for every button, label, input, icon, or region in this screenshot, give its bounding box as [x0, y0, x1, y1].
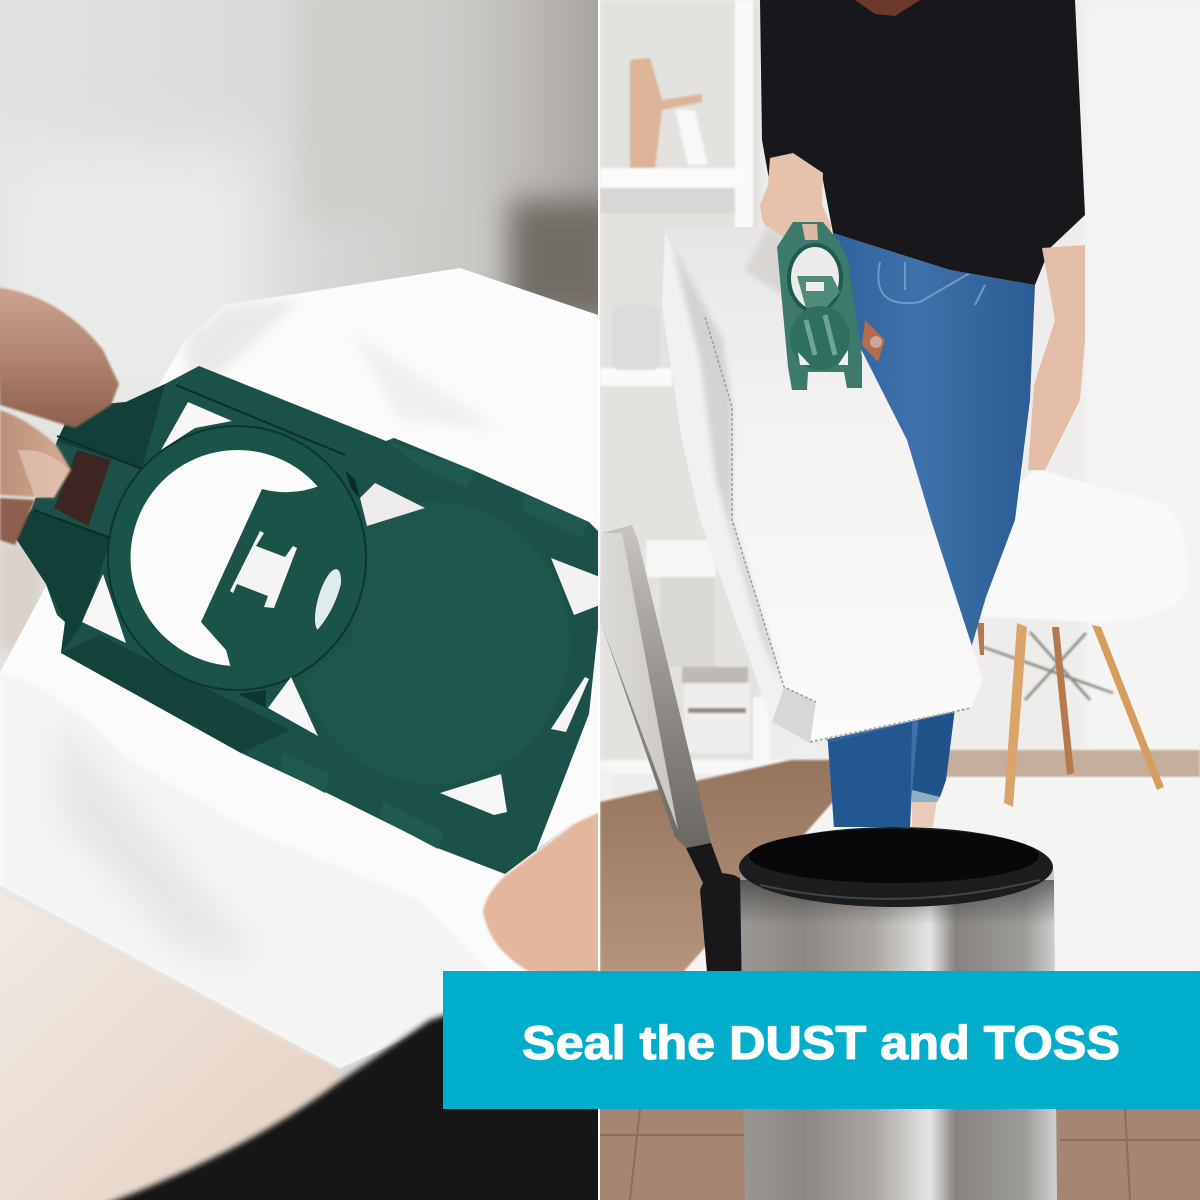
dark foreground sleeve	[90, 960, 610, 1200]
wooden floor	[600, 760, 835, 972]
inner tab seen through ring	[201, 486, 342, 666]
green bag collar	[777, 222, 862, 390]
panel: person dropping bag into bin	[600, 0, 1200, 1200]
hand right thumb	[483, 812, 600, 972]
trash can hinge	[686, 843, 742, 971]
banner	[443, 971, 1200, 1109]
collar ring	[110, 476, 341, 678]
white rug	[684, 777, 1200, 972]
light sliver beside tab	[314, 569, 342, 630]
green plastic collar	[13, 366, 600, 874]
blurred room background	[0, 0, 598, 1083]
large disc of the collar	[298, 502, 570, 784]
dark slot with hand behind	[54, 450, 111, 526]
stainless trash can body	[740, 870, 1057, 1200]
blurred table surface	[0, 880, 340, 1200]
person: forearm and hand on right	[1028, 245, 1085, 470]
rear floor strip	[900, 750, 1200, 778]
white divider between photos	[598, 0, 600, 1200]
trash can rim	[739, 827, 1053, 907]
floor below banner	[600, 1109, 1200, 1200]
person: hand holding collar	[760, 153, 831, 243]
collar edge tabs	[305, 470, 589, 849]
white shelf unit	[600, 0, 780, 774]
bright room background	[600, 0, 1200, 971]
banner text: Seal the DUST and TOSS	[522, 1016, 1120, 1069]
person: jeans	[827, 233, 1035, 827]
person: black sweater and arms	[760, 0, 1085, 285]
trash can lid	[600, 525, 711, 848]
white chair	[977, 470, 1164, 807]
H-shaped slot	[230, 531, 297, 608]
collar outline lines	[34, 385, 345, 538]
white dust bag	[662, 227, 983, 743]
hand left fingers	[0, 287, 119, 545]
panel: close-up of bag collar	[0, 0, 620, 1200]
white filter bag	[0, 268, 598, 1068]
triangular cut-outs	[161, 402, 232, 450]
